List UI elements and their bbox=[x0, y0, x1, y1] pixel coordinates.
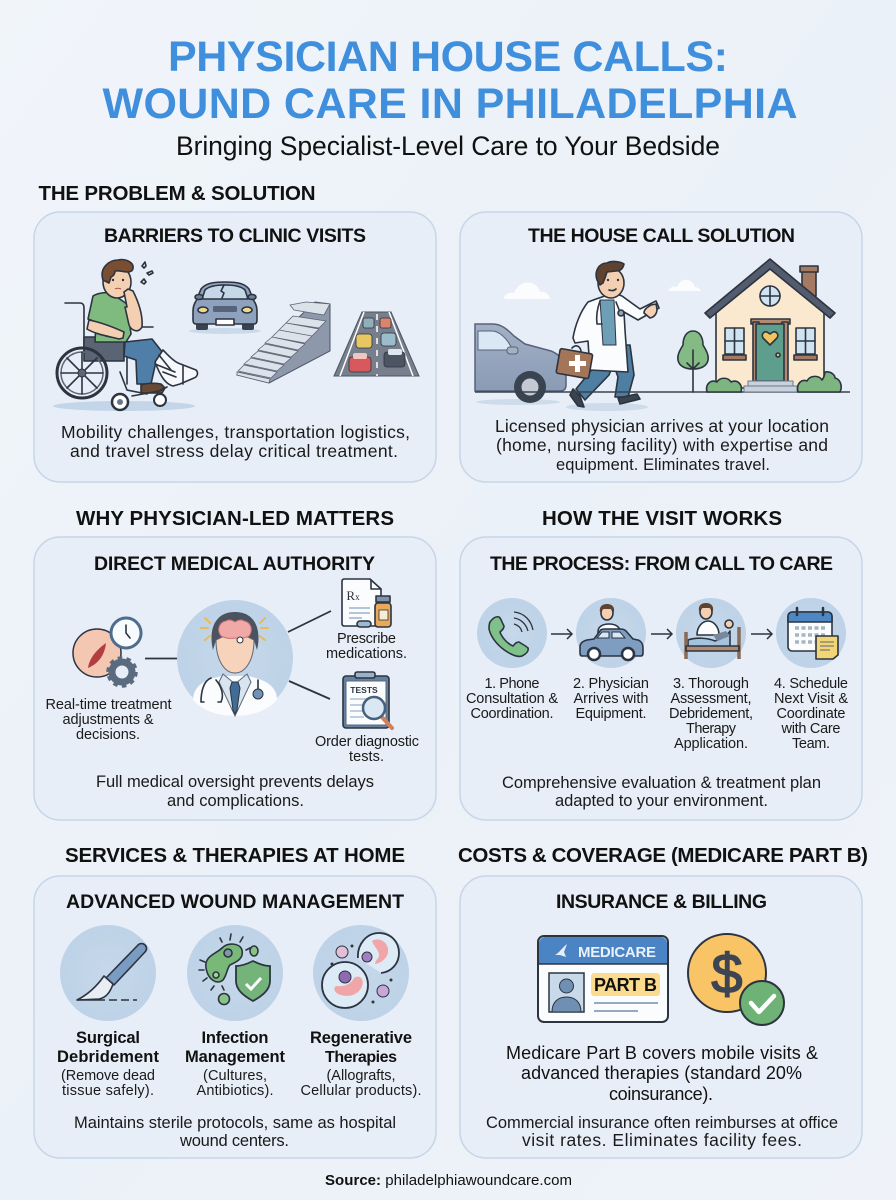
label: real-time treatment bbox=[46, 697, 172, 743]
panel heading: process: THE PROCESS: FROM CALL TO CARE bbox=[490, 553, 833, 575]
label: step 3 bbox=[669, 676, 753, 752]
body text: authority: and complications. bbox=[167, 792, 304, 810]
body text: solution bbox=[495, 416, 829, 474]
label: order diagnostic tests: Order diagnostic bbox=[315, 734, 419, 750]
illustration: clouds bbox=[504, 280, 701, 299]
body text: commercial insurance: visit rates. Eliminates facility fees. bbox=[522, 1130, 802, 1150]
label: step 3: Application. bbox=[674, 736, 748, 752]
label: step 3: Assessment, bbox=[670, 691, 752, 707]
label: regenerative therapies: Cellular products). bbox=[300, 1083, 422, 1099]
body text: process bbox=[502, 774, 821, 810]
arrow 2 bbox=[651, 629, 672, 639]
label: infection management: (Cultures, bbox=[203, 1068, 267, 1084]
title: WOUND CARE IN PHILADELPHIA bbox=[102, 80, 798, 128]
body text: process: adapted to your environment. bbox=[555, 792, 768, 810]
panel heading: wound management: ADVANCED WOUND MANAGEMENT bbox=[66, 891, 404, 913]
label: real-time treatment: adjustments & bbox=[62, 712, 154, 728]
label: surgical debridement: tissue safely). bbox=[62, 1083, 154, 1099]
heading: costs and coverage: COSTS & COVERAGE (MEDICARE PART B) bbox=[458, 844, 868, 867]
label: infection management bbox=[185, 1029, 286, 1099]
panel heading: authority: DIRECT MEDICAL AUTHORITY bbox=[94, 553, 375, 575]
label: infection management: Infection bbox=[202, 1029, 268, 1047]
label: step 2: Arrives with bbox=[574, 691, 648, 707]
heading: why physician-led matters: WHY PHYSICIAN-LED MATTERS bbox=[76, 507, 394, 530]
body text: authority bbox=[96, 773, 374, 810]
step 1: phone consultation bbox=[466, 598, 558, 722]
label: step 4: Next Visit & bbox=[774, 691, 848, 707]
step 3: thorough assessment bbox=[669, 598, 753, 752]
label: step 1: Consultation & bbox=[466, 691, 558, 707]
label: step 4: Coordinate bbox=[776, 706, 846, 722]
label: step 4 bbox=[774, 676, 848, 752]
illustration: patient in wheelchair bbox=[53, 260, 197, 411]
label: order diagnostic tests: tests. bbox=[349, 749, 384, 765]
label: step 1 bbox=[466, 676, 558, 722]
illustration: doctor walking with bag bbox=[556, 261, 659, 411]
label: real-time treatment: decisions. bbox=[76, 727, 140, 743]
label: step 4: Team. bbox=[792, 736, 830, 752]
body text: barriers: and travel stress delay critical treatment. bbox=[70, 441, 398, 461]
label: prescribe medications: medications. bbox=[326, 646, 407, 662]
label: infection management: Management bbox=[185, 1048, 286, 1066]
body text: authority: Full medical oversight prevents delays bbox=[96, 773, 374, 791]
panel: the process bbox=[460, 537, 862, 820]
icon: medicare part b card bbox=[538, 936, 668, 1022]
subtitle: Bringing Specialist-Level Care to Your Bedside bbox=[176, 131, 720, 161]
icon: medicare part b card: PART B bbox=[594, 975, 657, 995]
label: regenerative therapies: Therapies bbox=[325, 1049, 397, 1066]
label: step 2: Equipment. bbox=[576, 706, 646, 722]
panel: the house call solution bbox=[460, 212, 862, 482]
icon: coin with check bbox=[688, 934, 784, 1025]
service: infection management bbox=[185, 925, 286, 1099]
icon: test clipboard and magnifier: TESTS bbox=[350, 685, 378, 695]
label: surgical debridement: Surgical bbox=[76, 1029, 140, 1047]
label: step 3: Therapy bbox=[686, 721, 737, 737]
label: order diagnostic tests bbox=[315, 734, 419, 765]
panel: barriers to clinic visits bbox=[34, 212, 436, 482]
icon: medicare part b card: MEDICARE bbox=[578, 944, 656, 961]
icon: test clipboard and magnifier bbox=[343, 672, 392, 728]
body text: commercial insurance: Commercial insurance often reimburses at office bbox=[486, 1114, 838, 1132]
body text: medicare coverage: Medicare Part B covers mobile visits & bbox=[506, 1043, 818, 1063]
label: real-time treatment: Real-time treatment bbox=[46, 697, 172, 713]
source line: Source: philadelphiawoundcare.com bbox=[325, 1172, 572, 1189]
body text: medicare coverage: coinsurance). bbox=[609, 1084, 713, 1104]
title: PHYSICIAN HOUSE CALLS: bbox=[168, 33, 728, 81]
heading: services and therapies at home: SERVICES & THERAPIES AT HOME bbox=[65, 844, 405, 867]
icon: phone bbox=[489, 617, 528, 656]
label: step 1: Coordination. bbox=[470, 706, 554, 722]
panel heading: solution: THE HOUSE CALL SOLUTION bbox=[528, 225, 795, 247]
body text: wound management: Maintains sterile protocols, same as hospital bbox=[74, 1114, 396, 1132]
heading: the problem and solution: THE PROBLEM & SOLUTION bbox=[38, 182, 316, 205]
icon: prescription and bottle bbox=[342, 579, 391, 627]
step 4: schedule next visit bbox=[774, 598, 848, 752]
illustration: parked car bbox=[475, 324, 566, 405]
icon: doctor with brain bbox=[177, 600, 293, 716]
label: infection management: Antibiotics). bbox=[196, 1083, 274, 1099]
body text: commercial insurance bbox=[486, 1114, 838, 1150]
icon: prescription and bottle: Rx bbox=[346, 588, 360, 603]
arrow 3 bbox=[751, 629, 772, 639]
icon: coin with check: $ bbox=[711, 942, 743, 1005]
illustration: house bbox=[475, 259, 850, 392]
step 2: physician arrives bbox=[573, 598, 649, 722]
body text: solution: Licensed physician arrives at your location bbox=[495, 416, 829, 436]
icon: scalpel bbox=[77, 944, 146, 1000]
label: surgical debridement: Debridement bbox=[57, 1048, 160, 1066]
service: surgical debridement bbox=[57, 925, 160, 1099]
panel heading: barriers: BARRIERS TO CLINIC VISITS bbox=[104, 225, 366, 247]
body text: solution: equipment. Eliminates travel. bbox=[556, 456, 770, 474]
icon: physician in car bbox=[580, 604, 643, 660]
illustration: staircase bbox=[237, 302, 330, 383]
label: regenerative therapies: Regenerative bbox=[310, 1029, 412, 1047]
label: step 2: 2. Physician bbox=[573, 676, 649, 692]
body text: barriers bbox=[61, 422, 410, 461]
label: surgical debridement bbox=[57, 1029, 160, 1099]
body text: process: Comprehensive evaluation & treatment plan bbox=[502, 774, 821, 792]
icon: calendar with note bbox=[788, 608, 838, 659]
panel heading: insurance: INSURANCE & BILLING bbox=[556, 891, 767, 913]
title bbox=[102, 33, 798, 128]
label: regenerative therapies: (Allografts, bbox=[326, 1068, 396, 1084]
body text: medicare coverage: advanced therapies (standard 20% bbox=[521, 1063, 802, 1083]
panel: direct medical authority bbox=[34, 537, 436, 820]
body text: medicare coverage bbox=[506, 1043, 818, 1104]
label: prescribe medications bbox=[326, 631, 407, 662]
body text: wound management: wound centers. bbox=[179, 1132, 289, 1150]
heading: how the visit works: HOW THE VISIT WORKS bbox=[542, 507, 782, 530]
icon: cells bbox=[322, 933, 399, 1008]
icon: doctor at bedside bbox=[686, 603, 739, 659]
label: step 2 bbox=[573, 676, 649, 722]
arrow 1 bbox=[551, 629, 572, 639]
illustration: traffic jam bbox=[334, 312, 419, 376]
label: step 1: 1. Phone bbox=[484, 676, 540, 692]
label: step 3: 3. Thorough bbox=[673, 676, 749, 692]
service: regenerative therapies bbox=[300, 925, 422, 1099]
label: step 4: 4. Schedule bbox=[774, 676, 848, 692]
panel: advanced wound management bbox=[34, 876, 436, 1158]
label: prescribe medications: Prescribe bbox=[337, 631, 396, 647]
body text: solution: (home, nursing facility) with expertise and bbox=[496, 435, 828, 455]
label: surgical debridement: (Remove dead bbox=[61, 1068, 155, 1084]
panel: insurance and billing bbox=[460, 876, 862, 1158]
body text: barriers: Mobility challenges, transportation logistics, bbox=[61, 422, 410, 442]
label: step 3: Debridement, bbox=[669, 706, 753, 722]
connector lines bbox=[145, 611, 331, 699]
body text: wound management bbox=[74, 1114, 396, 1150]
icon: wound with clock and gear bbox=[73, 618, 141, 686]
illustration: tree bbox=[678, 331, 708, 392]
label: regenerative therapies bbox=[300, 1029, 422, 1099]
illustration: broken-down car bbox=[189, 282, 261, 334]
icon: bacteria and shield bbox=[199, 934, 270, 1004]
label: step 4: with Care bbox=[780, 721, 840, 737]
